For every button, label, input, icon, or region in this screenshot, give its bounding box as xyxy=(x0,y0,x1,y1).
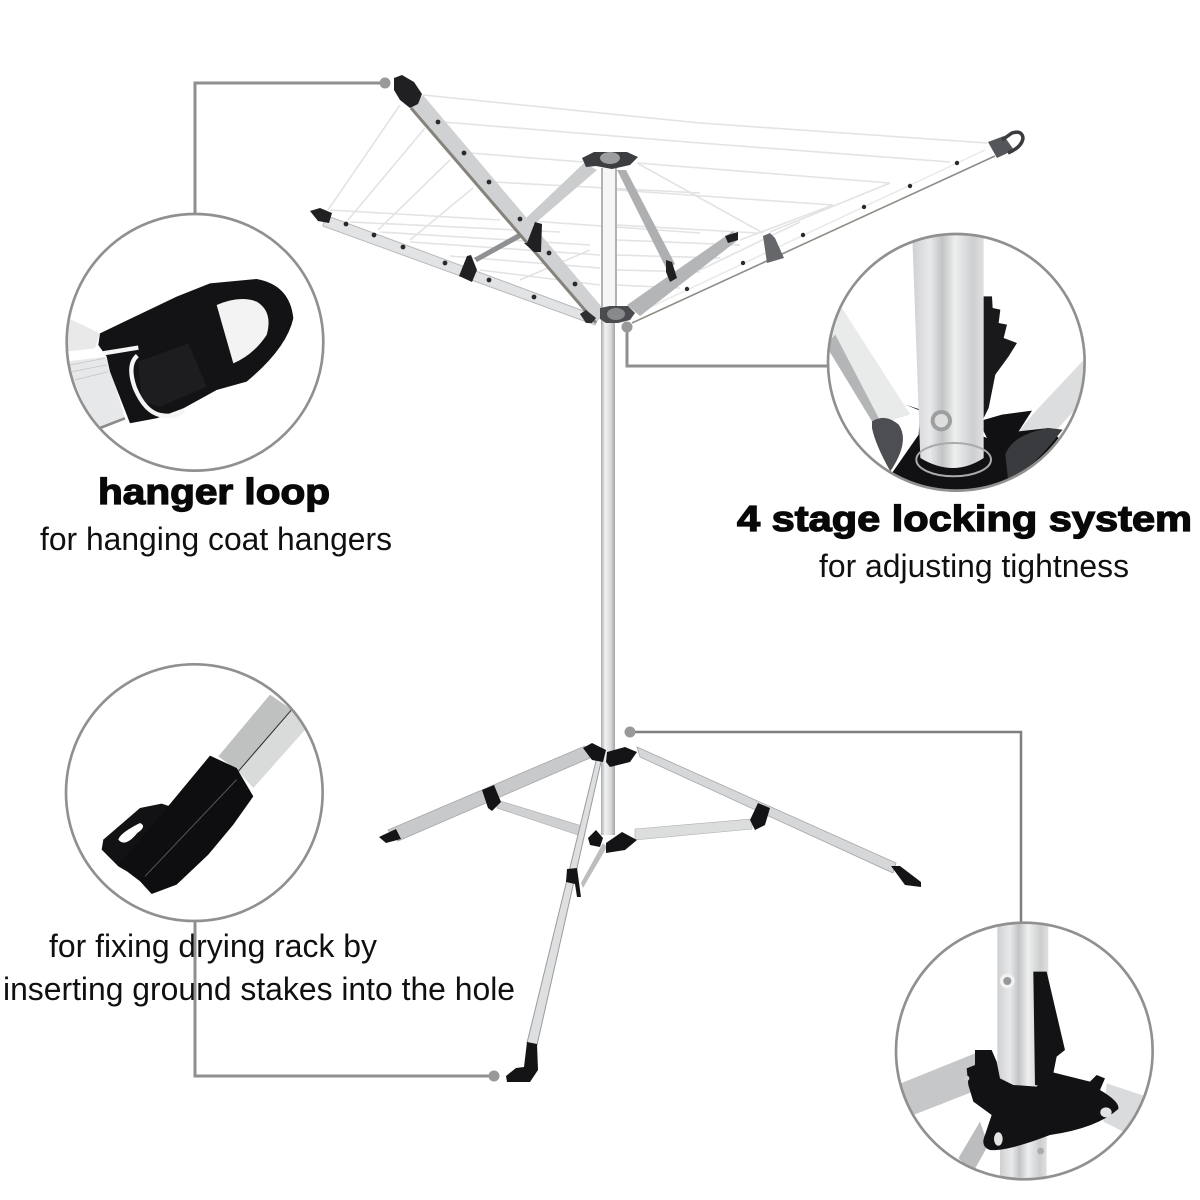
lower left strut xyxy=(474,230,528,262)
connector: ground stake xyxy=(195,920,500,1082)
upper bolt xyxy=(1000,974,1015,988)
text: ground stake description: inserting ground stakes into the hole xyxy=(3,971,515,1007)
rivets xyxy=(344,120,959,299)
arm end xyxy=(65,357,125,432)
loop hole xyxy=(217,299,269,363)
front arm xyxy=(411,95,606,323)
base xyxy=(892,405,1065,495)
drying rack xyxy=(310,75,1023,1082)
tripod legs xyxy=(388,746,896,1045)
clothes lines xyxy=(328,95,987,288)
connector: hanger loop xyxy=(195,78,390,214)
circle: 4 stage locking detail xyxy=(825,228,1089,495)
circle: hanger loop detail xyxy=(65,214,323,471)
text: hanger loop description: for hanging coat hangers xyxy=(40,521,392,557)
white cord xyxy=(103,348,184,416)
tab hole xyxy=(118,823,143,843)
text: locking description: for adjusting tightness xyxy=(819,548,1129,584)
upper right strut xyxy=(617,170,675,270)
back arm xyxy=(627,231,738,316)
text: ground stake description: for fixing drying rack by xyxy=(49,928,377,964)
lower hub xyxy=(580,306,635,323)
right strut xyxy=(1019,360,1084,432)
arm bracket xyxy=(763,233,784,263)
pole xyxy=(912,228,984,468)
tip loop clip xyxy=(988,132,1023,158)
clips on arms xyxy=(310,75,738,282)
tripod clips and feet xyxy=(379,743,921,1082)
right hub plate xyxy=(1005,428,1063,485)
circle: lower locking detail xyxy=(896,918,1153,1182)
pole: upper section xyxy=(602,165,616,315)
hub xyxy=(967,1050,1118,1150)
heading: locking system: 4 stage locking system xyxy=(737,498,1192,539)
left hub plate xyxy=(872,418,903,471)
bolt xyxy=(931,410,952,431)
circle: ground stake detail xyxy=(66,664,323,921)
left strut xyxy=(825,308,910,425)
pole: main section xyxy=(601,320,615,835)
cord ends xyxy=(68,319,100,352)
tube xyxy=(218,695,307,788)
body shading xyxy=(138,343,207,407)
struts xyxy=(897,1053,1147,1172)
connector: lower locking xyxy=(624,726,1021,922)
stepped locking teeth xyxy=(984,296,1017,418)
collar xyxy=(916,443,991,476)
loop body xyxy=(98,279,293,423)
lower pole xyxy=(1000,1136,1047,1178)
top hub xyxy=(582,152,638,169)
text: ground stake description xyxy=(3,928,515,1007)
black cap xyxy=(118,756,253,894)
left arm xyxy=(323,215,597,325)
upper pole xyxy=(997,918,1048,1088)
lever xyxy=(1033,972,1065,1087)
hub bolts xyxy=(964,1076,1112,1154)
right arm edge xyxy=(632,150,995,323)
end tab xyxy=(102,804,170,871)
connector: locking system xyxy=(622,322,829,366)
heading: hanger loop: hanger loop xyxy=(98,471,330,512)
upper left strut xyxy=(524,163,597,226)
